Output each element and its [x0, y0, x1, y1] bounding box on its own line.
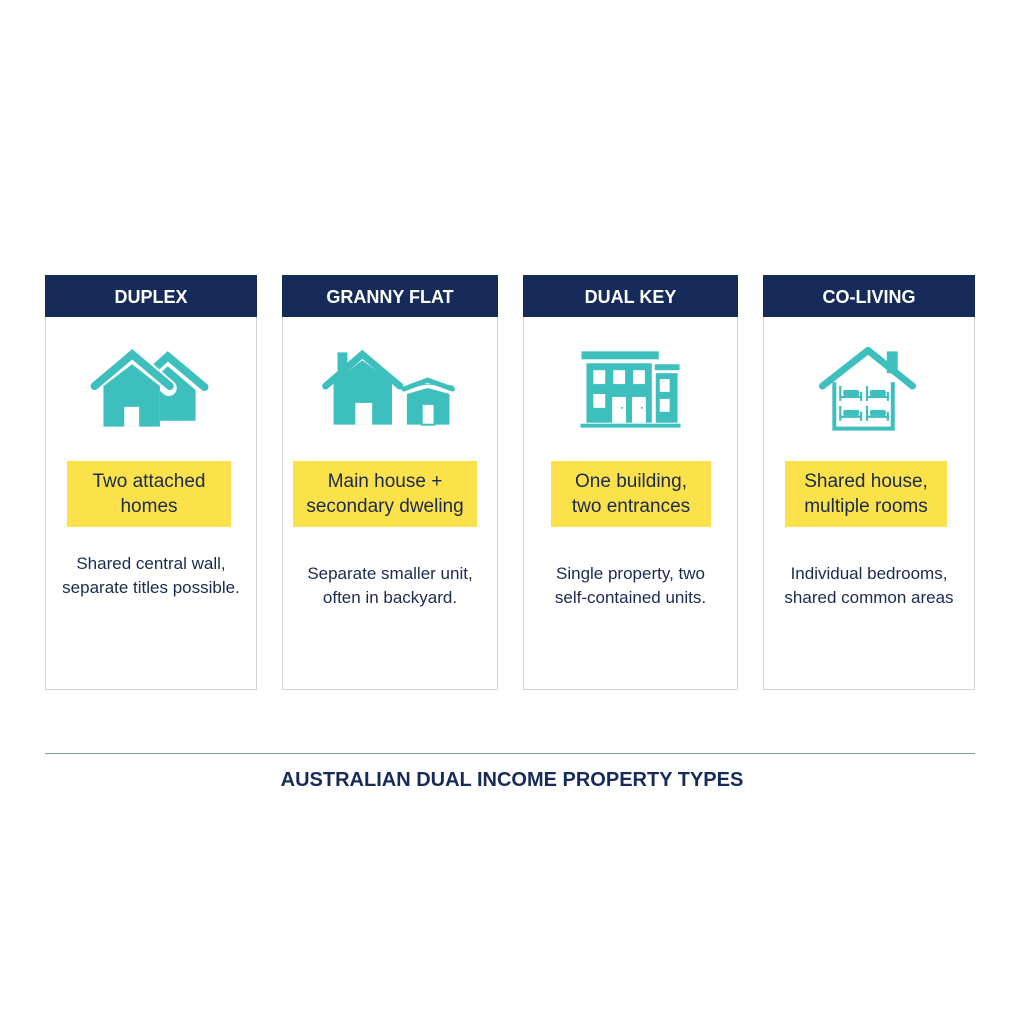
tag: Shared house,: [804, 471, 928, 492]
description: [307, 564, 473, 607]
description: [62, 554, 240, 597]
description: Individual bedrooms,: [791, 564, 947, 583]
tag: two entrances: [572, 496, 690, 517]
icon: building with two entrances: [580, 351, 681, 428]
tag: [67, 461, 231, 527]
description: Shared central wall,: [76, 554, 226, 573]
icon: house with beds: [819, 346, 916, 431]
tag: [785, 461, 947, 527]
title: AUSTRALIAN DUAL INCOME PROPERTY TYPES: [281, 769, 743, 791]
header: DUAL KEY: [585, 287, 676, 307]
icon: house and small dwelling: [322, 350, 455, 426]
description: self-contained units.: [555, 588, 706, 607]
description: often in backyard.: [323, 588, 457, 607]
description: Separate smaller unit,: [307, 564, 473, 583]
tag: Two attached: [92, 471, 206, 492]
tag: homes: [120, 496, 178, 517]
description: [784, 564, 954, 607]
description: [555, 564, 706, 607]
tag: [293, 461, 477, 527]
header: [523, 275, 738, 317]
header: duplex: DUPLEX: [114, 287, 188, 307]
header: CO-LIVING: [822, 287, 916, 307]
description: shared common areas: [784, 588, 954, 607]
tag: secondary dweling: [306, 496, 464, 517]
header: [763, 275, 975, 317]
card: duplex: [45, 275, 257, 690]
tag: One building,: [575, 471, 687, 492]
tag: Main house +: [328, 471, 442, 492]
header: [282, 275, 498, 317]
icon: two attached houses: [90, 349, 208, 427]
card: granny flat: [282, 275, 498, 690]
card: dual key: [523, 275, 738, 690]
tag: multiple rooms: [804, 496, 928, 517]
description: separate titles possible.: [62, 578, 240, 597]
header: GRANNY FLAT: [326, 287, 454, 307]
description: Single property, two: [556, 564, 705, 583]
header: duplex: [45, 275, 257, 317]
tag: [551, 461, 711, 527]
card: co-living: [763, 275, 975, 690]
